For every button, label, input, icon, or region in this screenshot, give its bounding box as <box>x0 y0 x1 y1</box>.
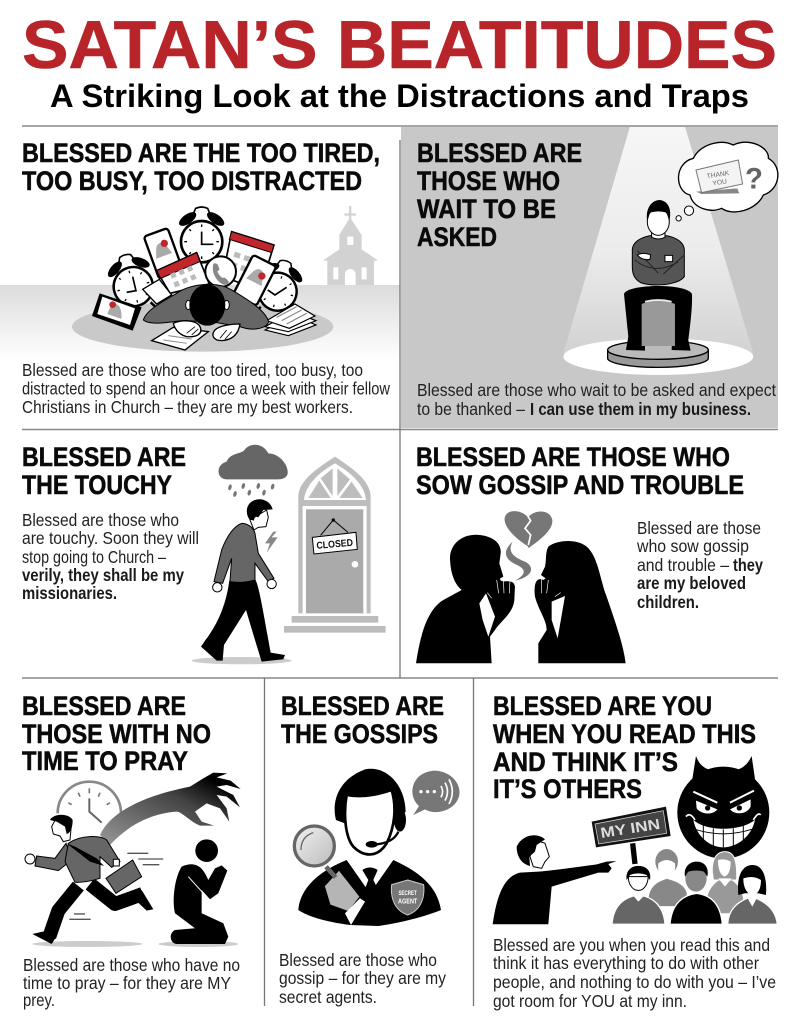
heading: the gossips <box>281 691 444 749</box>
running man <box>25 815 153 947</box>
icon: broken heart and smoke <box>505 511 552 581</box>
subtitle: A Striking Look at the Distractions and Traps <box>50 78 749 114</box>
heading: no time to pray: BLESSED ARE <box>22 691 186 721</box>
icon: reaching claw <box>100 773 241 845</box>
heading: sow gossip <box>416 442 744 500</box>
person slumped over desk <box>143 284 269 341</box>
heading: it's others: IT’S OTHERS <box>493 774 642 804</box>
icon: right alarm clock <box>249 255 308 321</box>
text: wait to be asked description: I can use them in my business. <box>530 399 751 419</box>
text: touchy description: Blessed are those who <box>22 510 179 530</box>
illustration: pointing man, devil, my inn sign and crowd <box>493 756 777 924</box>
motion lines <box>69 853 163 919</box>
icon: front calendar <box>157 253 209 293</box>
panel: it's others <box>493 691 777 1011</box>
icon: lower left phone <box>92 293 142 331</box>
text: no time to pray description: Blessed are those who have no <box>23 955 240 975</box>
icon: small notepad <box>143 279 172 304</box>
panel: wait to be asked <box>401 127 778 428</box>
silhouette: man <box>416 535 515 663</box>
heading: wait to be asked: THOSE WHO <box>417 166 560 196</box>
text: too tired description: Blessed are those who are too tired, too busy, too <box>22 360 363 380</box>
icon: phone call circle <box>205 256 236 287</box>
icon: paper under hand <box>152 327 208 350</box>
text: gossips description: gossip – for they are my <box>279 968 446 988</box>
text: wait to be asked description <box>417 380 776 419</box>
icon: secret agent badge: SECRET <box>398 890 417 897</box>
thought bubble: thank you: THANK <box>706 170 730 180</box>
heading: too tired: BLESSED ARE THE TOO TIRED, <box>22 138 380 168</box>
heading: it's others: BLESSED ARE YOU <box>493 691 712 721</box>
heading: the touchy: BLESSED ARE <box>22 442 186 472</box>
icon: left alarm clock <box>102 249 163 317</box>
person: front middle <box>670 862 722 924</box>
icon: secret agent badge: AGENT <box>398 899 418 906</box>
agent figure <box>298 769 441 926</box>
crowd <box>612 849 777 924</box>
heading: the gossips: BLESSED ARE <box>281 691 444 721</box>
icon: secret agent badge <box>391 880 424 915</box>
text: wait to be asked description: to be thanked – <box>417 399 525 419</box>
sign: my inn <box>592 807 671 864</box>
heading: sow gossip: BLESSED ARE THOSE WHO <box>416 442 730 472</box>
text: too tired description: distracted to spend an hour once a week with their fellow <box>22 378 390 398</box>
heading: it's others <box>493 691 756 804</box>
illustration: secret agent with headset and magnifier <box>294 769 460 926</box>
text: no time to pray description: time to pray – for they are MY <box>23 973 231 993</box>
icon: top alarm clock <box>177 207 227 268</box>
text: touchy description: missionaries. <box>22 583 117 603</box>
text: touchy description <box>22 510 199 603</box>
text: it's others description: think it has everything to do with other <box>493 953 759 973</box>
illustration: man walking away from closed church door <box>192 445 386 664</box>
heading: wait to be asked: ASKED <box>417 222 497 252</box>
heading: too tired: TOO BUSY, TOO DISTRACTED <box>22 166 362 196</box>
sign: closed <box>312 518 357 554</box>
text: sow gossip description: are my beloved <box>637 573 746 593</box>
text: it's others description: people, and nothing to do with you – I’ve <box>493 972 776 992</box>
heading: too tired <box>22 138 380 196</box>
text: it's others description <box>493 935 776 1011</box>
text: sow gossip description: and trouble – <box>637 555 729 575</box>
illustration: exhausted person surrounded by clocks, phones and calendars <box>72 207 333 352</box>
text: sow gossip description: children. <box>637 592 699 612</box>
icon: church silhouette <box>323 206 378 285</box>
icon: back calendar <box>223 232 274 290</box>
icon: right phone <box>233 255 276 306</box>
text: gossips description <box>279 950 446 1007</box>
sign: closed: CLOSED <box>316 538 353 552</box>
icon: magnifying glass and hand <box>294 826 365 925</box>
text: sow gossip description: they <box>733 555 763 575</box>
pointing man <box>493 835 617 924</box>
text: touchy description: stop going to Church – <box>22 547 166 567</box>
text: touchy description: verily, they shall be my <box>22 565 184 585</box>
person: back right <box>707 852 743 913</box>
thought bubble: thank you: YOU <box>712 178 728 187</box>
sign: my inn: MY INN <box>599 817 661 842</box>
person: back left <box>648 849 687 907</box>
text: it's others description: got room for YOU at my inn. <box>493 991 687 1011</box>
text: sow gossip description <box>636 518 763 612</box>
text: too tired description: Christians in Church – they are my best workers. <box>22 397 353 417</box>
heading: it's others: WHEN YOU READ THIS <box>493 719 756 749</box>
panel: the gossips <box>279 691 460 1007</box>
heading: no time to pray: TIME TO PRAY <box>22 746 188 776</box>
spotlight beam <box>563 127 753 353</box>
person: front left <box>612 866 665 924</box>
icon: grinning devil <box>677 756 769 859</box>
icon: briefcase <box>106 859 142 893</box>
icon: speech bubble <box>412 771 460 815</box>
heading: the touchy <box>22 442 186 500</box>
seated man <box>624 200 692 351</box>
icon: wall clock <box>58 782 121 823</box>
text: it's others description: Blessed are you when you read this and <box>493 935 770 955</box>
title: SATAN’S BEATITUDES <box>22 7 777 83</box>
thought bubble: thank you: ? <box>745 162 763 195</box>
text: no time to pray description: prey. <box>23 990 55 1010</box>
walking man <box>192 499 292 664</box>
panel: too tired, too busy, too distracted <box>0 138 400 417</box>
text: sow gossip description: who sow gossip <box>636 536 749 556</box>
icon: church door <box>284 457 386 633</box>
heading: the touchy: THE TOUCHY <box>22 470 172 500</box>
text: gossips description: Blessed are those who <box>279 950 437 970</box>
illustration: runner chased by claw, person praying <box>25 773 241 947</box>
person: front right <box>728 865 777 924</box>
panel: no time to pray <box>22 691 241 1010</box>
heading: wait to be asked <box>417 138 582 252</box>
heading: no time to pray <box>22 691 211 776</box>
heading: wait to be asked: WAIT TO BE <box>417 194 556 224</box>
text: no time to pray description <box>23 955 240 1010</box>
heading: wait to be asked: BLESSED ARE <box>417 138 582 168</box>
text: sow gossip description: Blessed are those <box>637 518 761 538</box>
pedestal <box>608 341 708 367</box>
thought bubble: thank you <box>676 142 778 221</box>
heading: no time to pray: THOSE WITH NO <box>22 719 211 749</box>
illustration: seated man in spotlight <box>563 127 778 375</box>
silhouette: woman <box>535 541 626 663</box>
icon: rain cloud <box>219 445 288 497</box>
praying person <box>158 839 238 947</box>
icon: upper left phone <box>144 228 183 279</box>
heading: sow gossip: SOW GOSSIP AND TROUBLE <box>416 470 744 500</box>
text: touchy description: are touchy. Soon they will <box>22 528 199 548</box>
text: gossips description: secret agents. <box>279 987 377 1007</box>
illustration: two silhouettes whispering <box>416 511 626 663</box>
heading: the gossips: THE GOSSIPS <box>281 719 438 749</box>
icon: paper stack <box>265 304 316 336</box>
text: too tired description <box>22 360 390 417</box>
panel: the touchy <box>22 442 386 664</box>
panel: sow gossip and trouble <box>416 442 763 663</box>
heading: it's others: AND THINK IT’S <box>493 747 678 777</box>
